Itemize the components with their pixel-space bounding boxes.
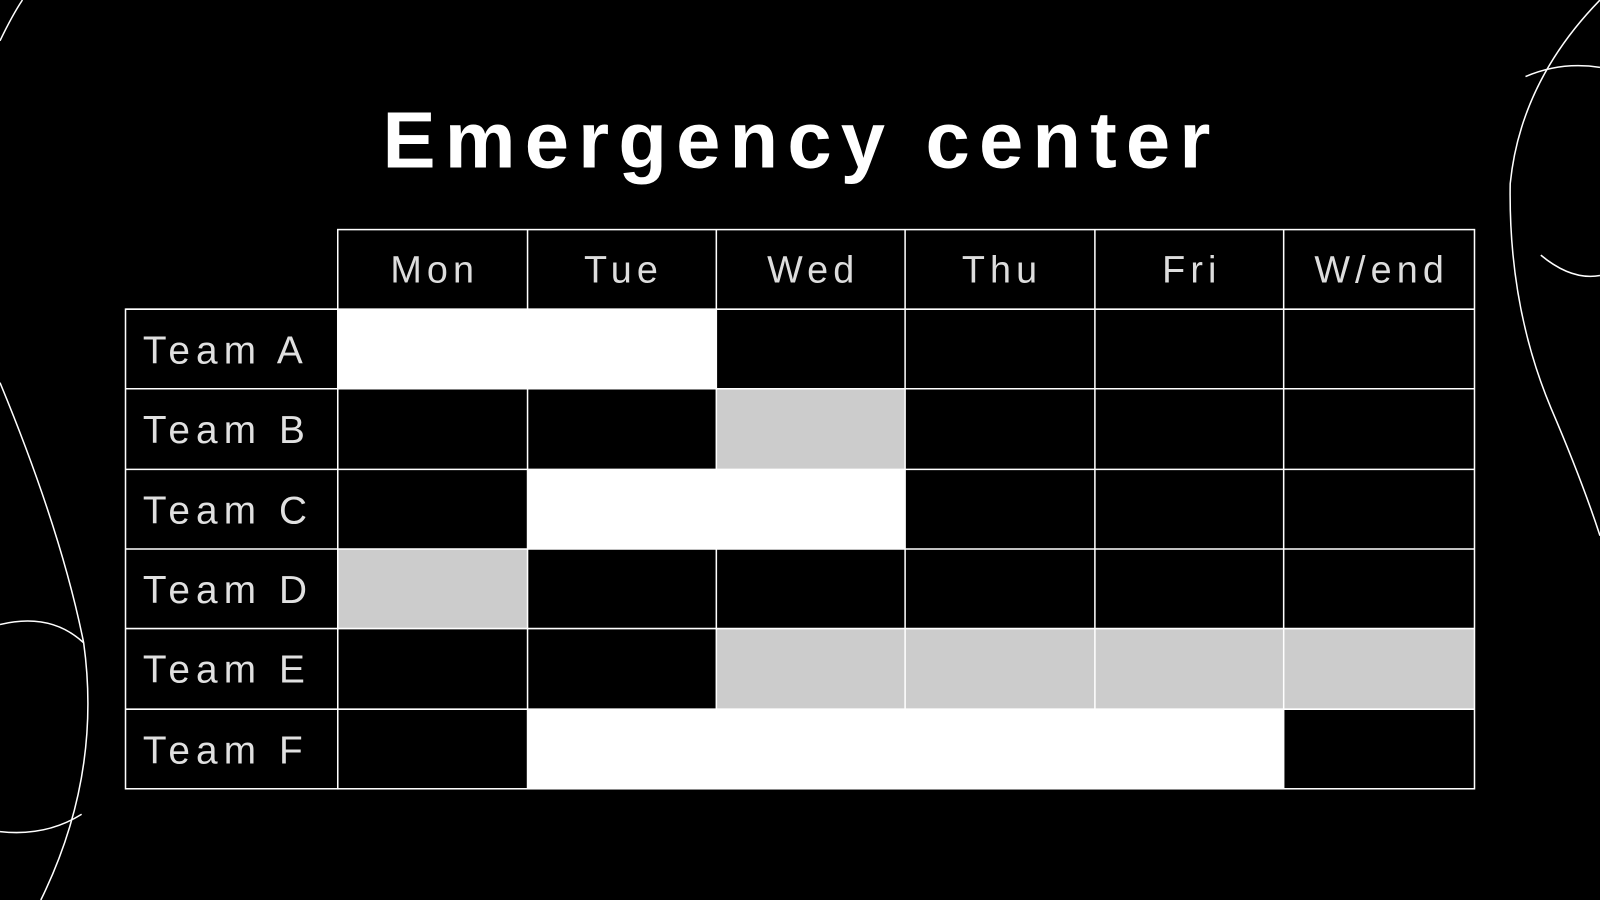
column headers: W/end (1314, 249, 1449, 291)
column headers: Mon (390, 249, 479, 291)
row labels (143, 329, 313, 772)
row labels: Team A (143, 329, 309, 372)
column headers: Wed (767, 249, 859, 291)
row labels: Team B (143, 409, 311, 452)
title: Emergency center (383, 95, 1219, 184)
column headers: Fri (1162, 249, 1222, 291)
filled cells (338, 309, 1474, 789)
column headers (390, 249, 1449, 291)
row labels: Team D (143, 569, 313, 612)
column headers: Thu (962, 249, 1042, 291)
column headers: Tue (584, 249, 663, 291)
row labels: Team E (143, 649, 311, 692)
row labels: Team C (143, 489, 313, 532)
schedule table (126, 230, 1474, 789)
row labels: Team F (143, 729, 309, 772)
